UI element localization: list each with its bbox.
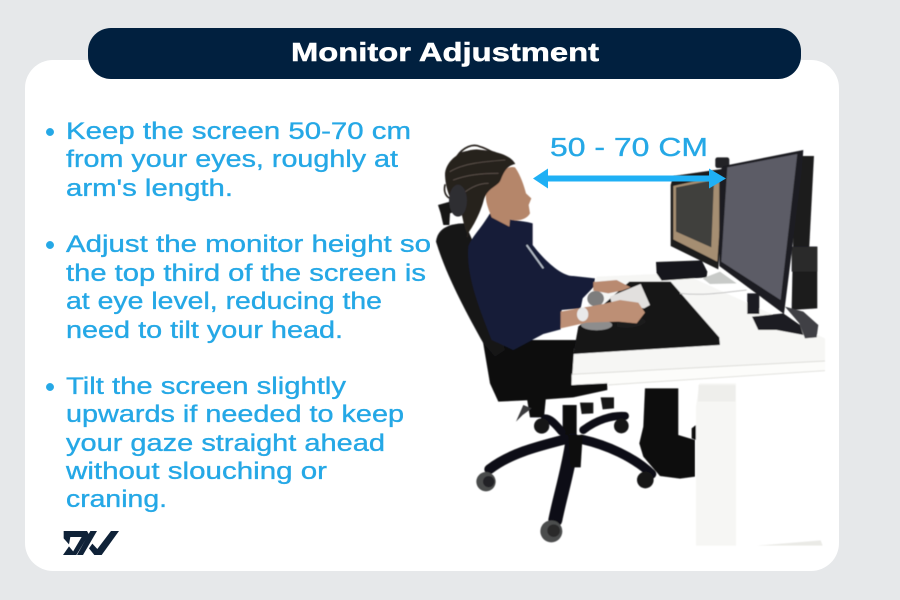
desk leg	[696, 383, 823, 546]
tip 3: screen tilt: without slouching or	[65, 458, 327, 485]
desk mat	[573, 282, 720, 354]
hands, keyboard and wrist rests	[561, 280, 650, 330]
chair casters	[476, 418, 654, 542]
hair	[444, 145, 515, 237]
tip 2: monitor height: Adjust the monitor height so	[66, 231, 431, 258]
lanyard	[527, 245, 543, 268]
icon: logo	[63, 531, 119, 555]
tip 2: monitor height: the top third of the screen is	[66, 260, 426, 287]
desk lower scene	[476, 340, 823, 546]
tip 2: monitor height	[46, 231, 431, 344]
tip 1: screen distance: from your eyes, roughly at	[66, 146, 398, 173]
rear monitor	[671, 168, 726, 269]
tip 3: screen tilt: upwards if needed to keep	[66, 401, 404, 428]
tip 2: monitor height: need to tilt your head.	[66, 317, 343, 344]
tip 3: screen tilt: your gaze straight ahead	[66, 430, 385, 457]
title: Monitor Adjustment	[291, 37, 599, 67]
text block: monitor adjustment tips	[46, 118, 431, 513]
tip 3: screen tilt: Tilt the screen slightly	[66, 373, 346, 400]
chair seat and base	[483, 340, 652, 520]
title bar	[88, 28, 801, 79]
tip 1: screen distance: Keep the screen 50-70 cm	[66, 118, 411, 145]
person's legs and footrest	[639, 388, 696, 479]
chair back and headrest	[436, 202, 505, 357]
desk top	[572, 274, 825, 385]
monitor arm and stand	[680, 156, 818, 338]
tip 3: screen tilt	[46, 373, 404, 513]
tip 1: screen distance	[46, 118, 411, 202]
person's torso	[468, 213, 595, 350]
front monitor	[719, 150, 803, 314]
webcam	[715, 157, 729, 168]
docking station	[656, 260, 707, 281]
tip 2: monitor height: at eye level, reducing the	[66, 288, 382, 315]
tip 1: screen distance: arm's length.	[66, 175, 233, 202]
person's head	[444, 145, 531, 237]
tip 3: screen tilt: craning.	[66, 486, 167, 513]
distance label: 50 - 70 CM	[550, 132, 708, 162]
illustration: person seated at desk	[436, 145, 825, 546]
desk upper scene	[436, 145, 825, 385]
distance arrow	[533, 168, 726, 188]
panel: white card	[25, 60, 839, 571]
